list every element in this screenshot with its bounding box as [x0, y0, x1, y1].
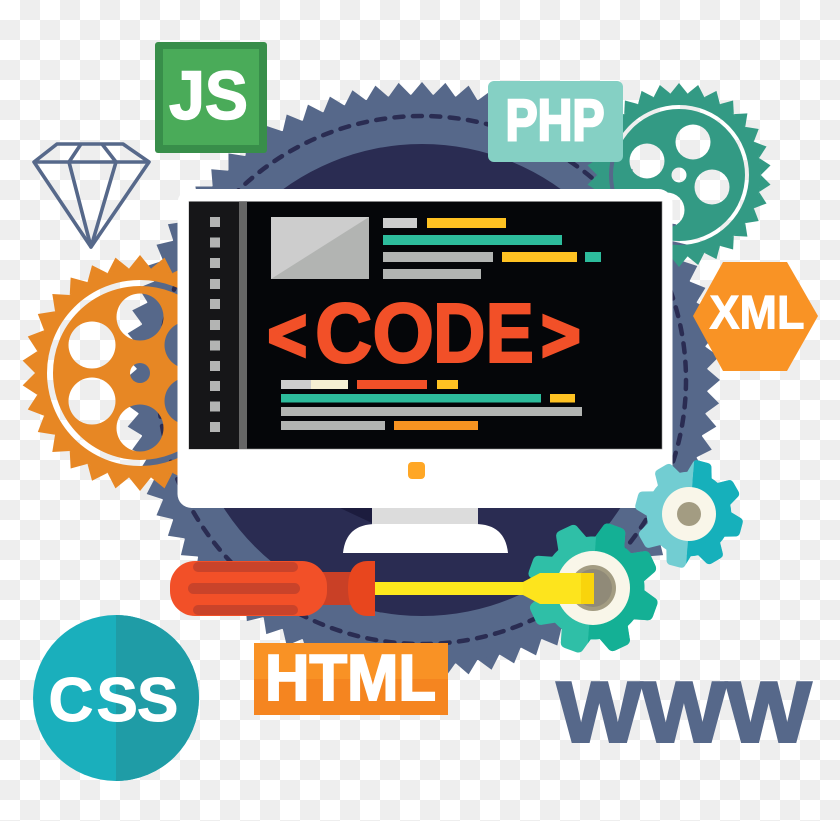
- screwdriver neck: [320, 572, 352, 605]
- code heading: [268, 286, 580, 381]
- screwdriver handle: [170, 561, 327, 616]
- icon: diamond: [34, 144, 149, 247]
- handle grooves: [188, 562, 300, 615]
- code heading: >: [542, 294, 580, 376]
- PHP badge: [488, 81, 623, 162]
- monitor stand base: [343, 524, 508, 553]
- XML hexagon badge: [693, 262, 818, 371]
- CSS badge: CSS: [48, 666, 178, 735]
- code heading: DE: [433, 286, 534, 380]
- screwdriver shaft: [370, 582, 525, 595]
- monitor stand neck: [372, 505, 478, 525]
- bottom code bars: [281, 380, 582, 430]
- HTML badge: HTML: [265, 641, 436, 714]
- CSS badge: [33, 615, 199, 781]
- JS badge: JS: [169, 57, 248, 134]
- screen: [189, 202, 662, 449]
- monitor: [178, 189, 672, 553]
- power button: [408, 462, 425, 479]
- monitor shadow: [340, 508, 372, 523]
- orange gear: [22, 255, 178, 491]
- light blue cog: [635, 460, 743, 568]
- XML hexagon badge: XML: [710, 286, 804, 338]
- monitor body: [178, 189, 672, 508]
- WWW label: WWW: [557, 666, 812, 760]
- top code bars: [383, 218, 601, 279]
- code heading: <: [268, 294, 307, 376]
- screwdriver tip: [523, 573, 581, 604]
- JS badge: [155, 42, 267, 153]
- screwdriver collar: [348, 561, 375, 616]
- image placeholder: [271, 217, 369, 279]
- green gear: [588, 83, 770, 267]
- teal cog: [528, 524, 658, 652]
- screwdriver: [170, 561, 594, 616]
- PHP badge: PHP: [506, 88, 604, 153]
- editor sidebar: [189, 202, 247, 449]
- large background gear: [107, 65, 737, 695]
- code heading: CO: [315, 287, 434, 381]
